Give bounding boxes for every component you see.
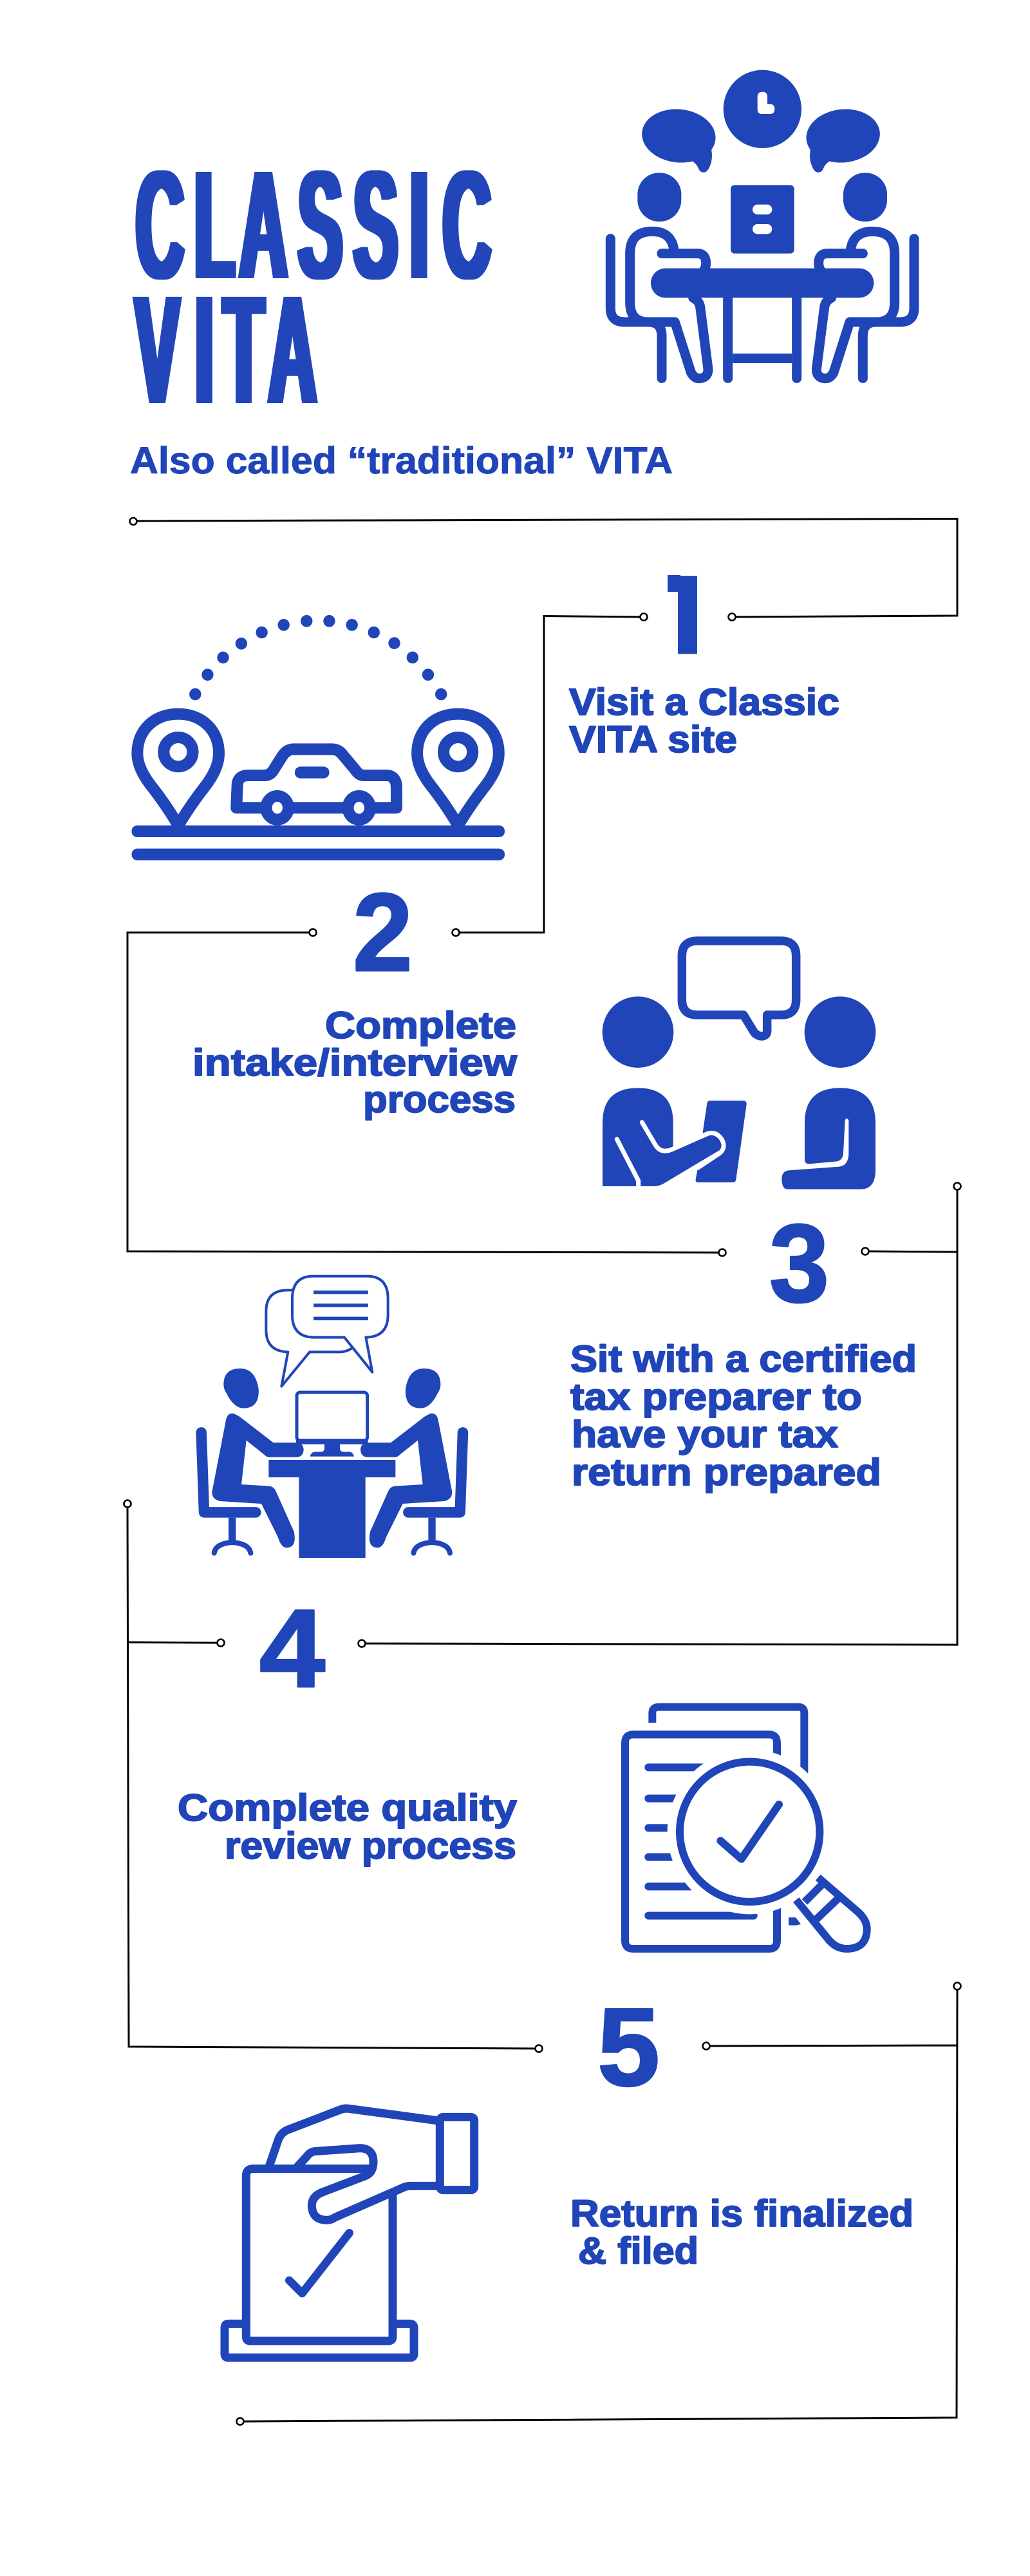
step number 1: 1 (646, 553, 724, 677)
step 3 text: Sit with a certified (570, 1338, 917, 1380)
icon part: right speech bubble (803, 106, 883, 173)
connector: step 5 to end (237, 1982, 960, 2425)
icon part: right person (816, 173, 914, 379)
step 5 text: & filed (578, 2230, 698, 2272)
icon part: speech bubbles (266, 1276, 388, 1387)
icon part: left person with tablet (603, 996, 747, 1187)
title: Classic VITA: CLASSIC (136, 139, 491, 312)
connector: step 2 to step 3 (127, 929, 726, 1256)
icon part: table (651, 269, 874, 378)
icon part: road (132, 826, 505, 860)
icon part: laptop (731, 185, 794, 254)
icon: meeting at a table (610, 70, 914, 379)
step 4 text: Complete quality (178, 1787, 517, 1829)
step number 4: 4 (259, 1587, 325, 1710)
icon part: front page (625, 1734, 801, 1949)
step 3 text: tax preparer to (570, 1376, 862, 1418)
title: Classic VITA: VITA (135, 264, 317, 437)
icon part: monitor (296, 1392, 368, 1457)
step 3 text: have your tax (572, 1414, 838, 1455)
connector: step 3 to step 4 (358, 1182, 960, 1647)
icon part: left person (610, 173, 708, 379)
icon part: left map pin (137, 714, 219, 826)
step 2 text: intake/interview (192, 1042, 518, 1084)
step 3 text: return prepared (572, 1452, 881, 1493)
icon part: desk (268, 1460, 395, 1558)
icon: hand placing ballot into box (225, 2108, 474, 2358)
icon part: dotted arc (189, 615, 447, 700)
step 1 text (569, 681, 839, 761)
step 4 text (178, 1787, 517, 1867)
icon part: hand (269, 2108, 474, 2220)
icon part: back page (652, 1707, 804, 1777)
icon: car between two map pins (132, 615, 505, 860)
icon: two people talking (603, 941, 876, 1189)
icon part: right person (782, 996, 876, 1189)
icon part: ballot box tray (225, 2324, 414, 2358)
step 1 text: VITA site (569, 719, 737, 761)
connector: step 1 to step 2 (452, 613, 648, 936)
step number 5: 5 (597, 1985, 660, 2109)
icon part: speech bubble (682, 941, 796, 1036)
subtitle: Also called “traditional” VITA (130, 440, 673, 482)
icon part: left speech bubble (639, 106, 718, 173)
title: Classic VITA (135, 139, 491, 437)
icon part: right map pin (417, 714, 499, 826)
step number 2: 2 (353, 871, 413, 994)
step 3 text (570, 1338, 917, 1493)
connector: step 4 to step 5 (124, 1501, 542, 2052)
step number 1 (668, 575, 697, 654)
icon part: left person and chair (201, 1368, 304, 1553)
step 5 text: Return is finalized (570, 2193, 913, 2235)
icon part: ballot paper (246, 2169, 393, 2341)
icon: two people at a computer desk (201, 1276, 463, 1558)
step 2 text: process (363, 1079, 516, 1121)
step 2 text (192, 1005, 518, 1121)
icon part: car (236, 749, 397, 820)
step 1 text: Visit a Classic (569, 681, 839, 723)
step number 3: 3 (769, 1202, 829, 1325)
icon: documents under magnifying glass (625, 1707, 867, 1949)
icon part: right person and chair (360, 1368, 463, 1553)
connector: title to step 1 (130, 518, 957, 621)
step 2 text: Complete (325, 1005, 516, 1046)
icon part: clock (724, 70, 801, 148)
icon part: magnifying glass (668, 1749, 867, 1949)
step 5 text (570, 2193, 913, 2272)
step 4 text: review process (225, 1825, 516, 1867)
